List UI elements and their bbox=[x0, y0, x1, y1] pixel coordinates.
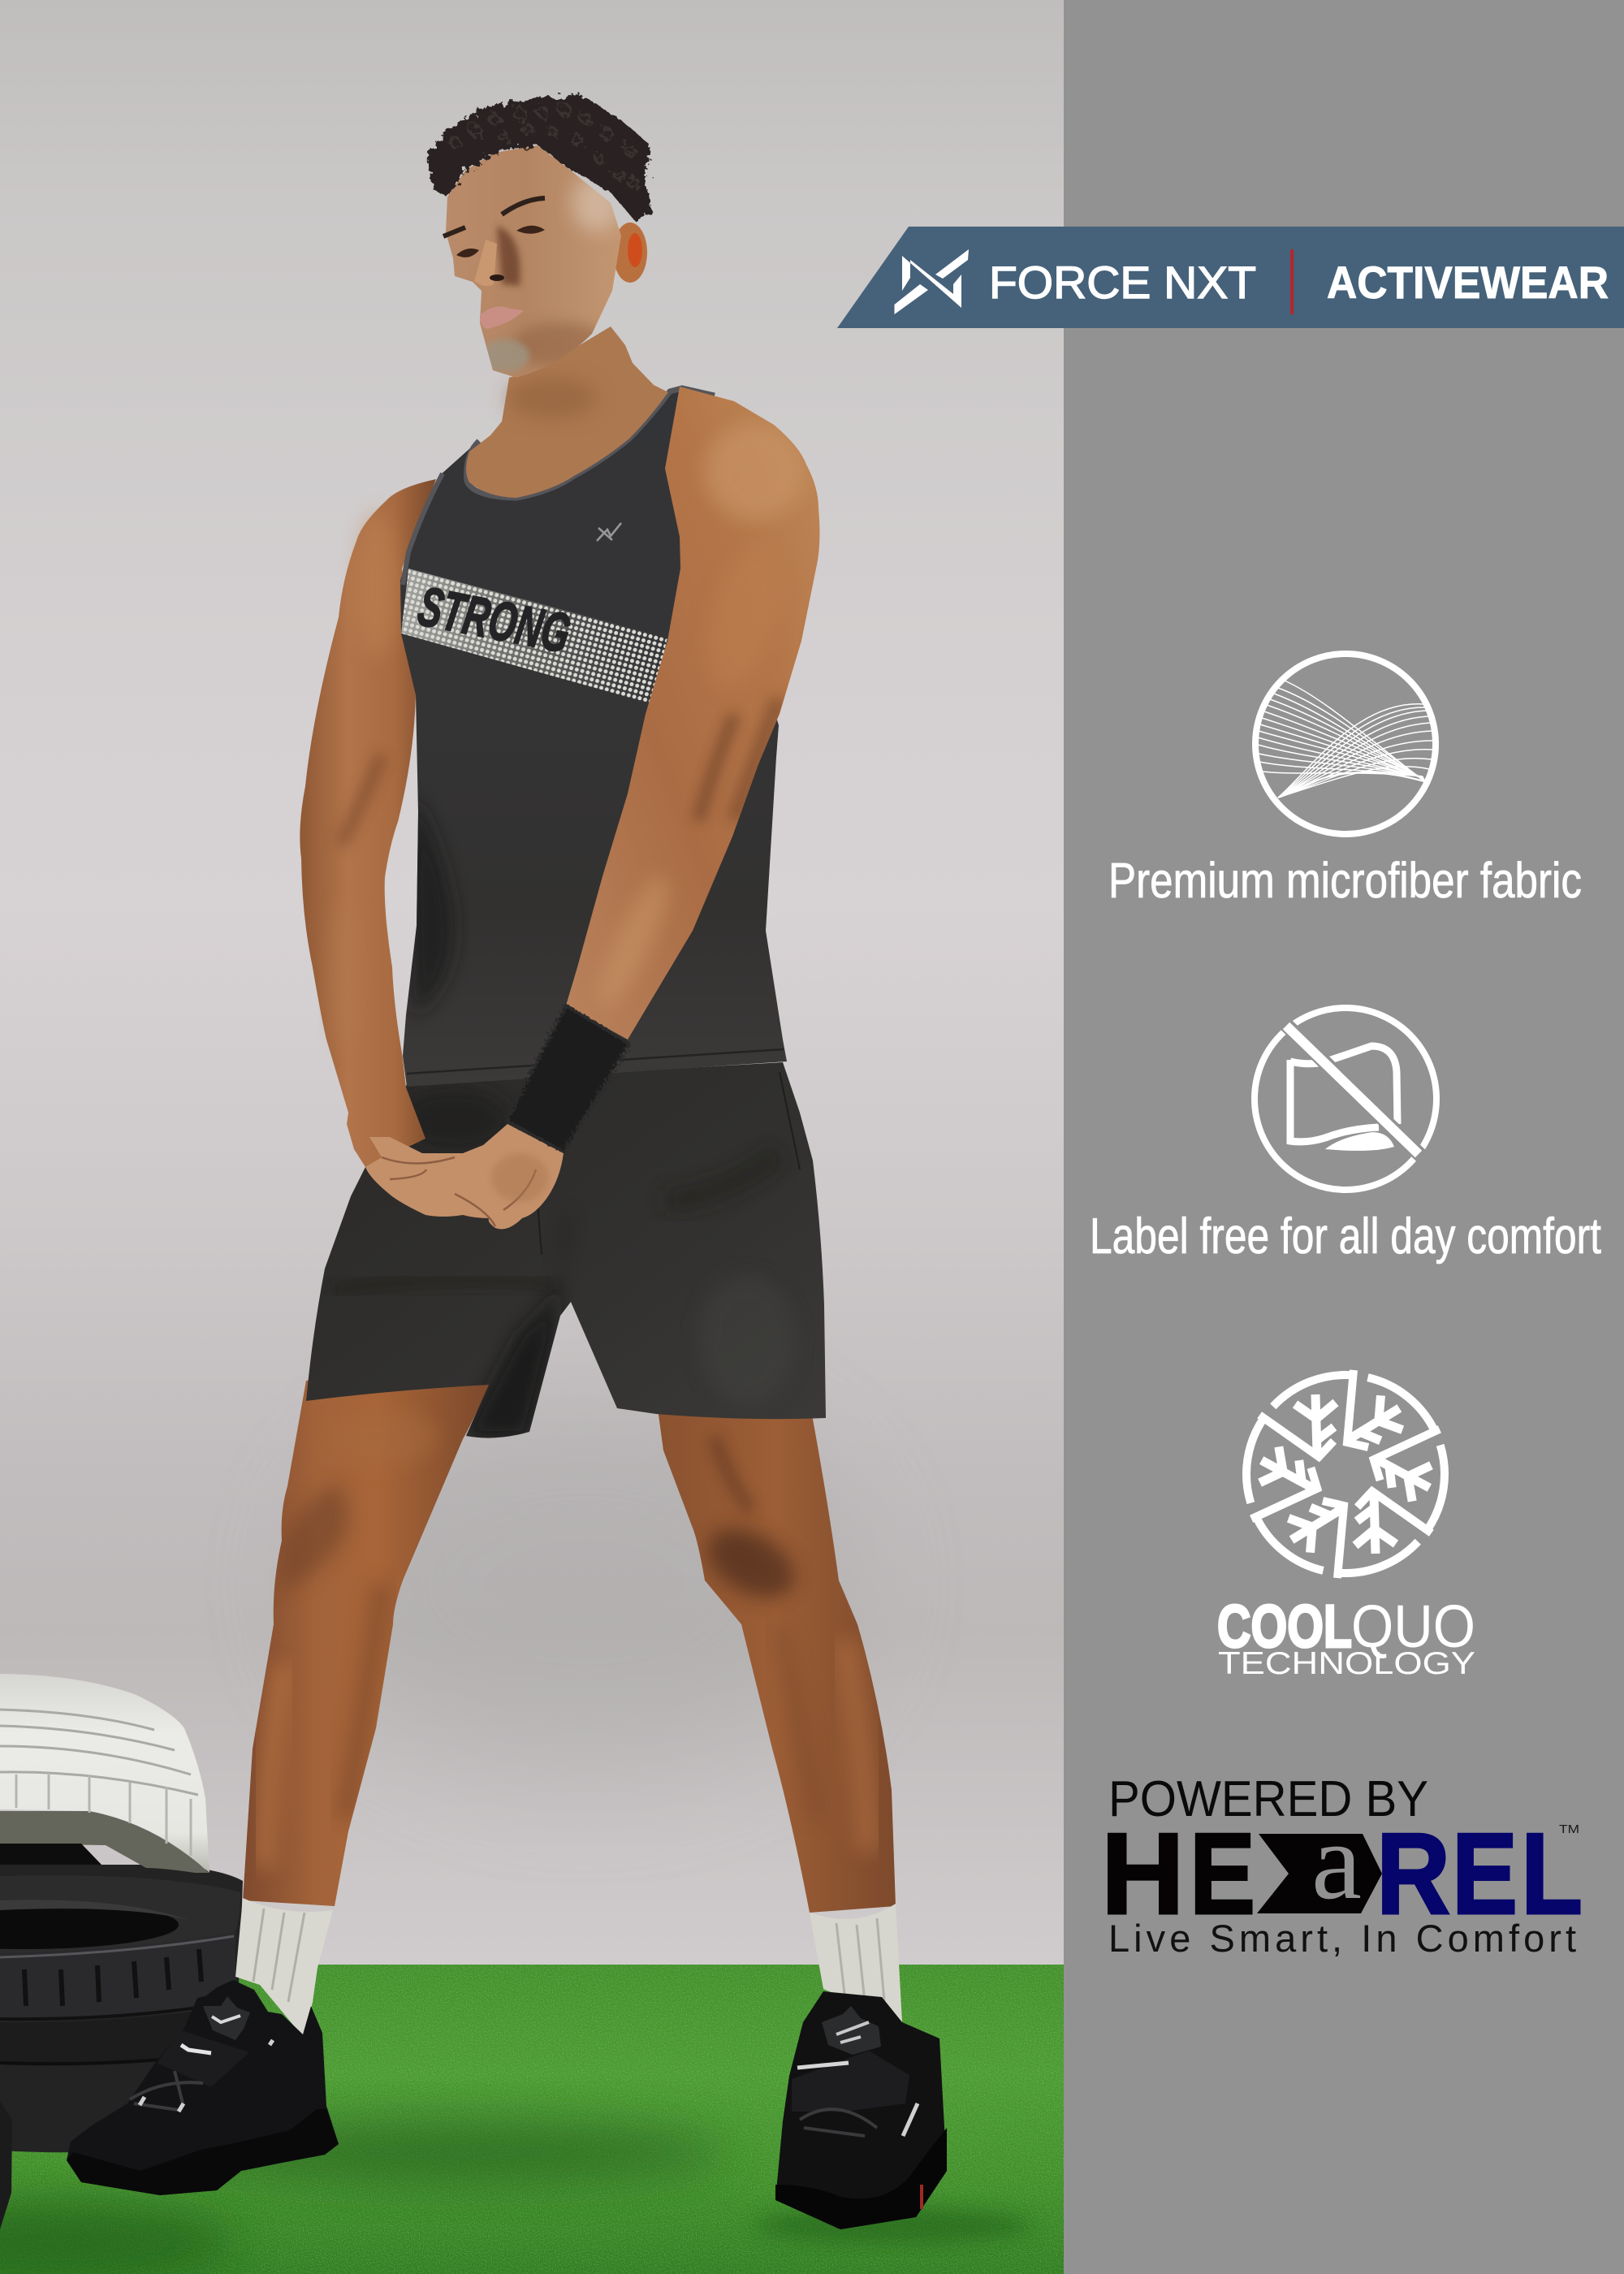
left shoe strap bbox=[157, 2030, 249, 2087]
icon: snowflake wheel bbox=[1220, 1360, 1471, 1589]
HEX letters bbox=[1101, 1809, 1255, 1939]
tank armhole trim bbox=[403, 473, 443, 585]
right shoe strap bbox=[792, 2051, 909, 2112]
brand name: FORCE NXT bbox=[989, 257, 1256, 308]
REL letters: E bbox=[1452, 1809, 1518, 1939]
clasped hands bbox=[365, 1124, 564, 1230]
left shoe tongue patch bbox=[203, 1996, 250, 2040]
studio wall background bbox=[0, 0, 1064, 1965]
REL letters: R bbox=[1376, 1809, 1450, 1939]
white painted tyre bbox=[0, 1674, 209, 1873]
right shoe laces bbox=[800, 2109, 877, 2136]
banner: Force NXT Activewear bbox=[837, 227, 1624, 328]
CoolQuo wordmark bbox=[1217, 1593, 1475, 1681]
right shoe sole bbox=[775, 2128, 947, 2229]
icon: crossed-out label bbox=[1255, 1008, 1436, 1190]
hexagon X with letter a: a bbox=[1311, 1801, 1362, 1922]
red divider bbox=[1290, 249, 1294, 314]
REL letters: L bbox=[1521, 1809, 1583, 1939]
temple highlight bbox=[572, 174, 621, 232]
REL letters bbox=[1376, 1809, 1583, 1939]
right arm and wrist bbox=[566, 387, 819, 1040]
leg: viewer right bbox=[656, 1397, 896, 1913]
curly hair bbox=[427, 95, 652, 222]
eyebrows bbox=[443, 198, 545, 236]
neck shadow bbox=[508, 377, 597, 419]
panel: product photo bbox=[0, 0, 1064, 2274]
tank chest logo bbox=[597, 523, 621, 541]
nostril bbox=[490, 275, 504, 281]
left shoe laces bbox=[130, 2071, 203, 2110]
lips bbox=[480, 306, 524, 329]
hexagon X with letter a bbox=[1257, 1801, 1382, 1922]
sock: viewer right bbox=[810, 1904, 902, 2022]
feature: microfiber fabric bbox=[1108, 654, 1582, 908]
left shoe sole bbox=[67, 2109, 339, 2195]
trademark: TM bbox=[1559, 1822, 1579, 1836]
right shoe tongue patch bbox=[822, 2006, 881, 2055]
tagline: Live Smart, In Comfort bbox=[1108, 1917, 1576, 1960]
STRONG halftone band bbox=[401, 568, 667, 704]
powered by line: POWERED BY bbox=[1108, 1771, 1428, 1827]
shoe: viewer right bbox=[775, 1991, 947, 2229]
CoolQuo wordmark: QUO bbox=[1351, 1593, 1475, 1660]
nose shadow bbox=[497, 226, 520, 286]
shorts bbox=[306, 1062, 826, 1438]
jaw shadow bbox=[512, 322, 609, 368]
left arm and hand bbox=[300, 479, 436, 1167]
ear bbox=[613, 223, 647, 283]
tank top bbox=[400, 387, 787, 1087]
HEX letters: H bbox=[1101, 1809, 1185, 1939]
nose highlight bbox=[474, 240, 497, 286]
CoolQuo wordmark: COOL bbox=[1217, 1593, 1352, 1660]
CoolQuo wordmark: TECHNOLOGY bbox=[1218, 1646, 1475, 1681]
leg: viewer left bbox=[243, 1364, 489, 1906]
panel: grey sidebar bbox=[1064, 0, 1624, 2274]
tank neckline trim bbox=[467, 388, 715, 498]
STRONG print: STRONG bbox=[413, 575, 575, 665]
artificial grass floor bbox=[0, 1965, 1064, 2274]
Powered by Hexarel logo bbox=[1101, 1771, 1583, 1960]
dumbbell edge bbox=[0, 2101, 12, 2229]
chin stubble bbox=[481, 339, 529, 372]
wristband bbox=[507, 1005, 629, 1152]
icon: woven fibre circle bbox=[1255, 654, 1436, 834]
black tyre bbox=[0, 1865, 243, 2152]
feature: label free bbox=[1090, 1008, 1601, 1265]
HEX letters: E bbox=[1190, 1809, 1255, 1939]
face bbox=[443, 145, 621, 378]
neck and chest bbox=[466, 326, 668, 498]
feature: CoolQuo technology bbox=[1217, 1360, 1475, 1681]
eyes bbox=[456, 226, 545, 257]
category name: ACTIVEWEAR bbox=[1327, 257, 1609, 308]
shoe: viewer left bbox=[67, 1980, 339, 2195]
icon: Force NXT logo mark bbox=[895, 249, 969, 314]
sock: viewer left bbox=[235, 1898, 333, 2038]
